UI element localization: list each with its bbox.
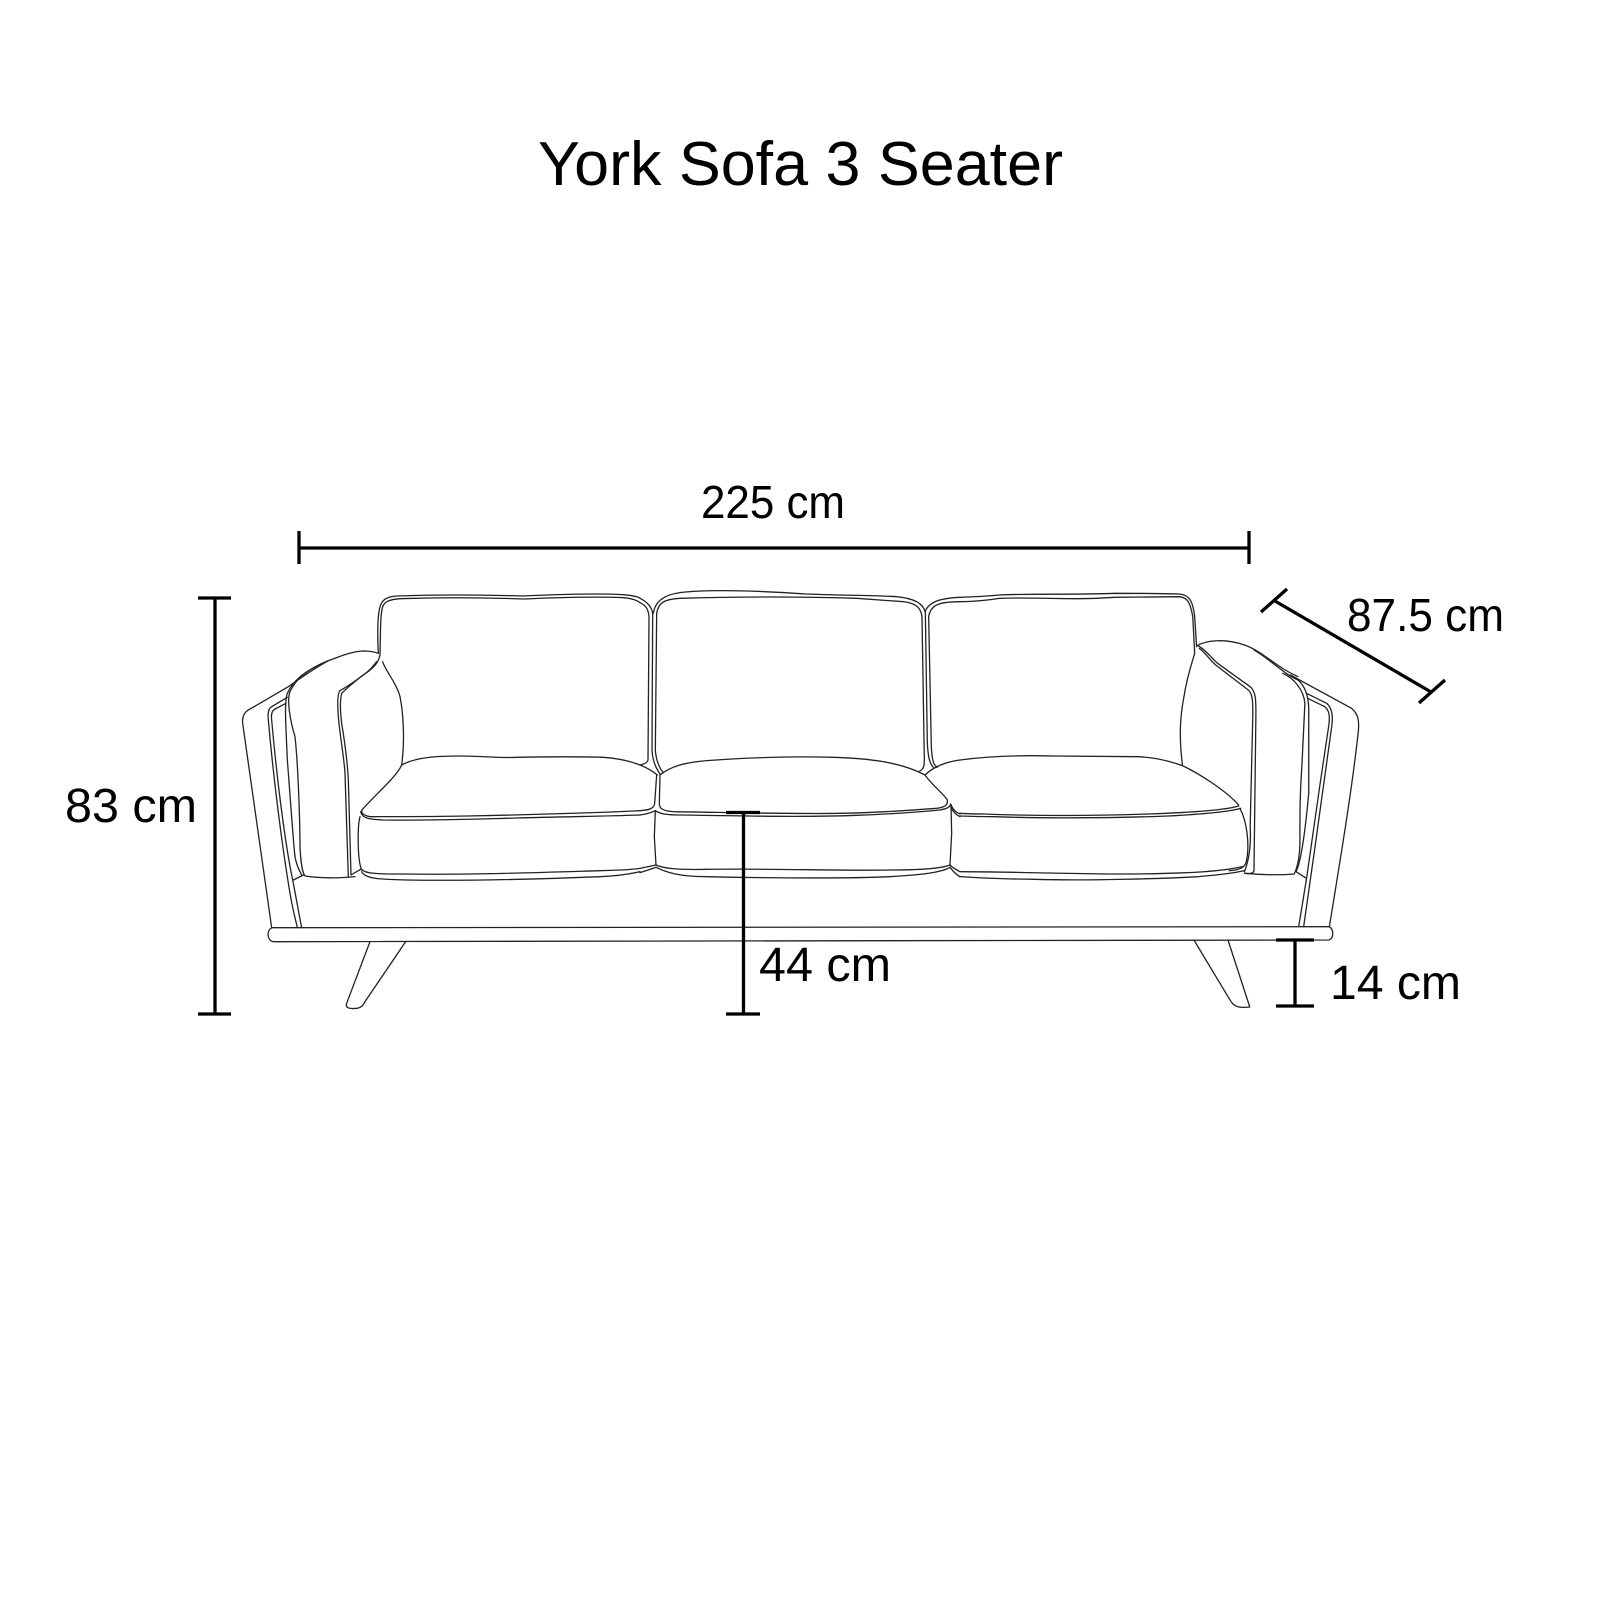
dimension: height 83 cm: 83 cm (65, 780, 197, 833)
dimension: depth 87.5 cm (1261, 589, 1504, 703)
dimension: leg height 14 cm: 14 cm (1330, 957, 1461, 1010)
left leg (346, 942, 406, 1009)
sofa right half (960, 593, 1359, 927)
title: York Sofa 3 Seater (538, 130, 1063, 199)
base rail (268, 927, 1333, 942)
sofa middle section (640, 591, 960, 878)
dimension: depth 87.5 cm: 87.5 cm (1347, 589, 1504, 641)
right leg (1194, 940, 1250, 1007)
sofa line drawing (243, 591, 1359, 1009)
dimension: width 225 cm: 225 cm (701, 476, 845, 528)
sofa left half (243, 594, 640, 928)
dimension: seat height 44 cm: 44 cm (759, 939, 891, 992)
